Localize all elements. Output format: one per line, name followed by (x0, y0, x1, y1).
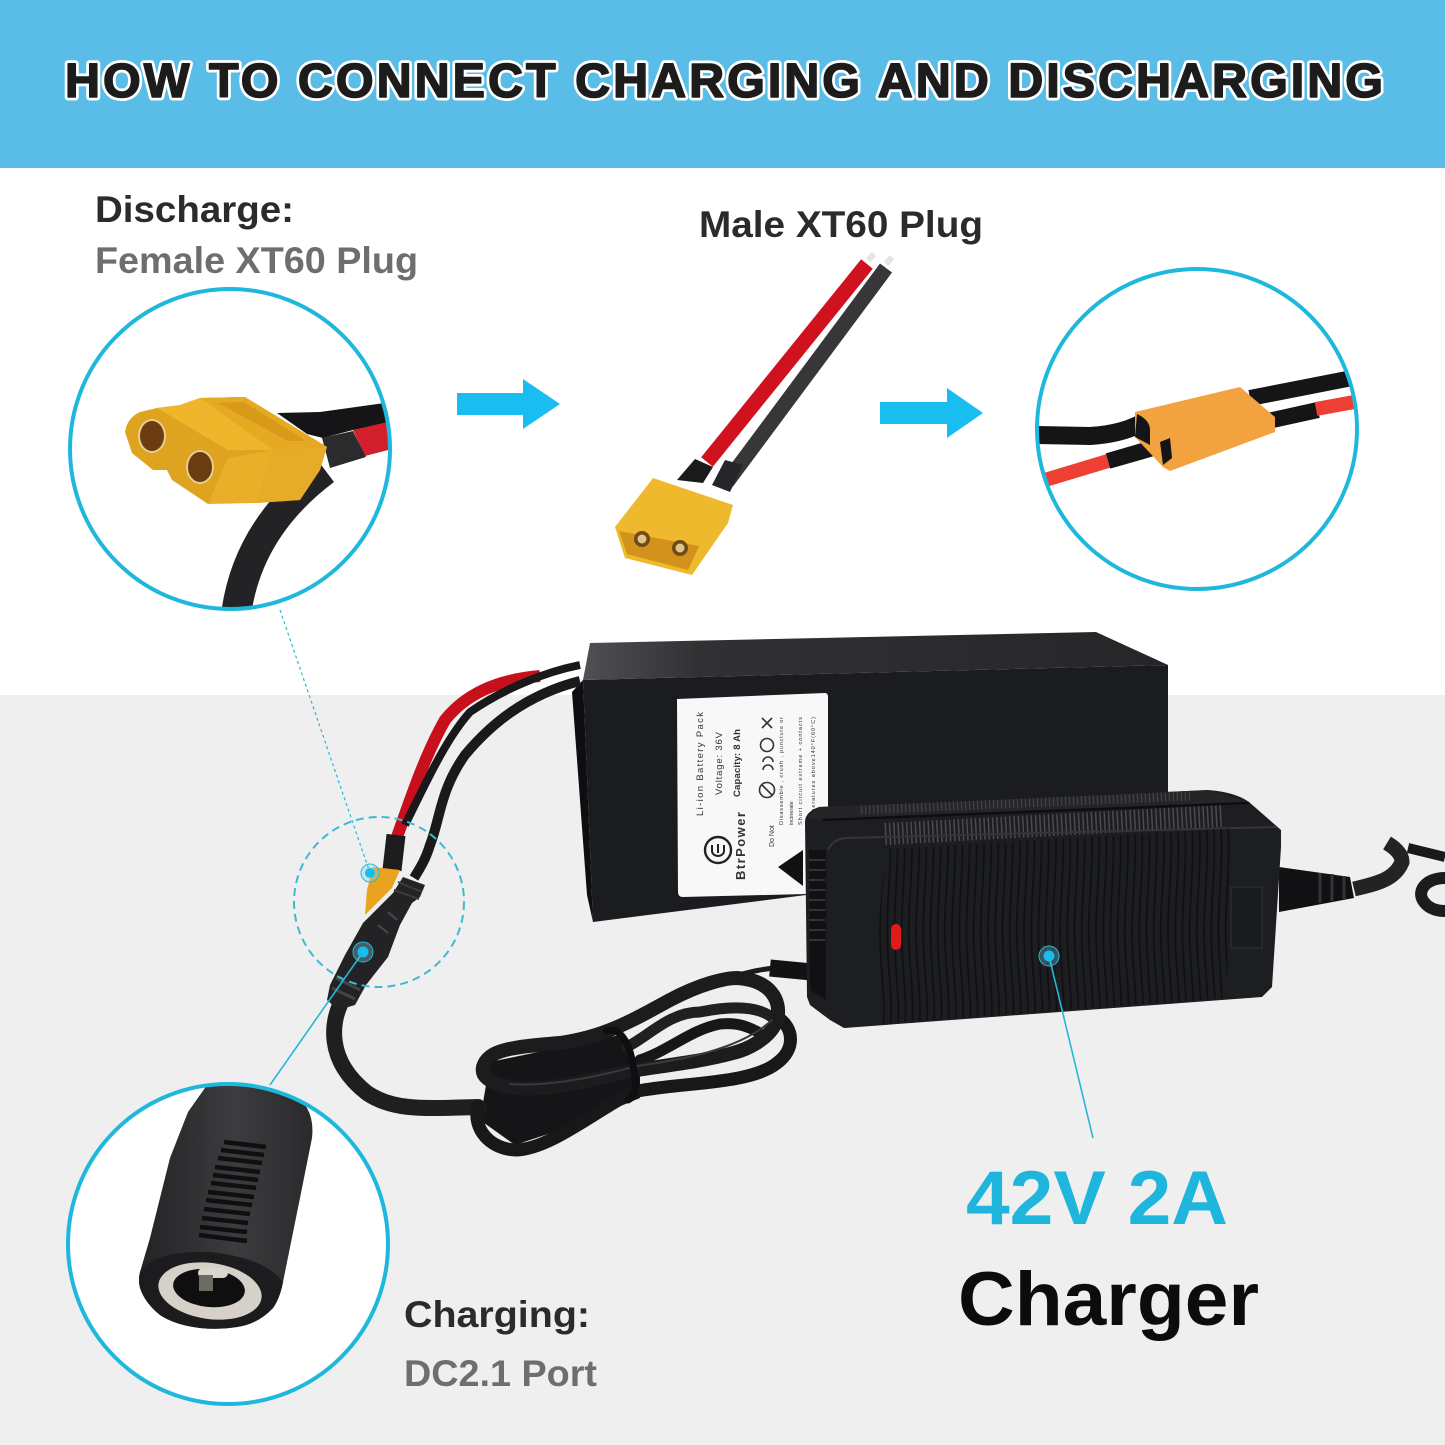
battery label (677, 693, 828, 897)
battery label: Li-ion Battery Pack (695, 712, 706, 816)
marker: DC port (353, 942, 373, 962)
battery label: Temperatures above140°F(60°C) (811, 717, 817, 825)
icon: logo (705, 837, 731, 863)
cord filled core (480, 1035, 640, 1145)
charging label: DC2.1 Port (404, 1353, 597, 1394)
battery label: Do Not (769, 825, 776, 847)
charger corner shade (828, 827, 1277, 850)
leader: charger (1049, 956, 1093, 1138)
male XT60 plug with wires (615, 254, 892, 575)
battery label: Short circuit extreme + contacts (798, 717, 804, 825)
battery label: Disassemble , crush , puncture or (779, 717, 785, 825)
strain relief (1279, 867, 1354, 912)
DC plug (139, 1085, 312, 1329)
panel: female XT60 plug circle (70, 289, 392, 615)
dashed highlight circle (294, 817, 464, 987)
mated connector (1135, 387, 1275, 471)
charging label: Charging: (404, 1294, 590, 1335)
marker: charger (1039, 946, 1059, 966)
dotted leader: XT60 (280, 610, 370, 873)
battery label: BtrPower (733, 812, 748, 880)
rubber cord tie (606, 1030, 635, 1100)
female connector body (125, 397, 327, 504)
discharge label: Discharge: (95, 189, 294, 230)
connectors at dashed circle (327, 867, 425, 1010)
charger top lid (807, 790, 1249, 820)
header banner (0, 0, 1445, 168)
discharge label: Female XT60 Plug (95, 240, 418, 281)
leader: DC port (270, 952, 363, 1085)
output cable at right (1279, 843, 1445, 912)
charger heading: Charger (958, 1257, 1259, 1342)
battery label: Voltage: 36V (714, 731, 725, 795)
charger left vents (809, 850, 826, 1000)
charger cables and cord loop (334, 968, 812, 1150)
discharge label (95, 189, 418, 281)
icon: red LED (891, 924, 901, 950)
arrow: male to connected (880, 388, 983, 438)
icon: certification marks (760, 718, 774, 798)
marker: XT60 (361, 864, 379, 882)
battery pack (572, 632, 1168, 922)
charger upper ribs (885, 816, 1222, 834)
battery label: Capacity: 8 Ah (732, 729, 743, 797)
panel: connected XT60 circle (1035, 269, 1360, 589)
battery label: incinerate (789, 801, 795, 825)
DC barrel connector (327, 877, 425, 1010)
charger (805, 790, 1281, 1028)
XT60 on battery wire (365, 867, 400, 915)
arrow: female to male (457, 379, 560, 429)
charger spec: 42V 2A (966, 1156, 1228, 1241)
male connector body (615, 478, 733, 575)
charging label (404, 1294, 597, 1394)
charger side panel (1231, 887, 1262, 948)
charger wavy texture (878, 828, 1234, 1024)
male plug label: Male XT60 Plug (699, 204, 983, 245)
icon: warning triangle (778, 850, 803, 886)
panel: DC port circle (68, 1084, 388, 1404)
battery output wires (392, 665, 580, 878)
title: HOW TO CONNECT CHARGING AND DISCHARGING (65, 54, 1383, 108)
title: HOW TO CONNECT CHARGING AND DISCHARGING (65, 54, 1383, 108)
